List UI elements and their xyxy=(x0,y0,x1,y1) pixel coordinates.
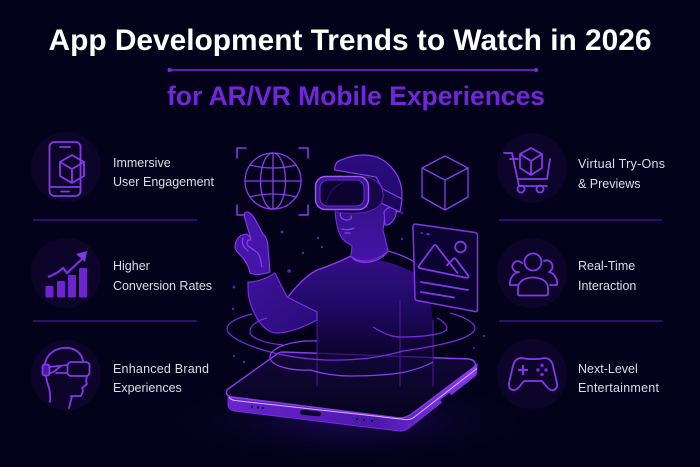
sparkle particles xyxy=(232,212,485,363)
figure: hair xyxy=(335,155,402,212)
figure: torso outline xyxy=(287,251,433,386)
label: Higher xyxy=(113,259,150,273)
label: Entertainment xyxy=(578,381,660,395)
figure: headset frame xyxy=(316,176,368,210)
label: Real-Time xyxy=(578,259,635,273)
figure: torso xyxy=(287,256,433,386)
figure: hand xyxy=(235,212,270,275)
figure: headset visor xyxy=(320,180,364,206)
rings xyxy=(227,313,475,376)
figure: sleeve xyxy=(248,273,317,333)
icon: floating image card xyxy=(413,224,478,312)
label: Interaction xyxy=(578,279,636,293)
figure: neck and face xyxy=(335,201,391,261)
icon: game controller xyxy=(509,358,557,390)
label: Conversion Rates xyxy=(113,279,212,293)
icon: three users xyxy=(510,254,557,296)
icon: phone with cube xyxy=(50,142,84,196)
title divider xyxy=(168,68,538,72)
panel: immersive user engagement xyxy=(31,132,215,202)
figure: nose and mouth xyxy=(340,212,354,233)
icon: rising bar chart xyxy=(46,251,87,298)
label: Virtual Try-Ons xyxy=(578,157,665,171)
icon: head with VR headset xyxy=(42,348,90,408)
figure: headset strap xyxy=(381,188,402,212)
panel: enhanced brand experiences xyxy=(31,340,209,410)
label: Immersive xyxy=(113,156,171,170)
dividers xyxy=(33,220,662,321)
title: App Development Trends to Watch in 2026 xyxy=(48,24,652,57)
icon: cart with cube xyxy=(504,148,550,192)
label: User Engagement xyxy=(113,175,215,189)
panel: virtual try-ons xyxy=(497,133,665,203)
label: Next-Level xyxy=(578,362,638,376)
panel: next-level entertainment xyxy=(497,339,660,409)
phone highlight xyxy=(229,368,477,420)
glow under phone xyxy=(170,378,530,462)
label: Experiences xyxy=(113,381,182,395)
panel: higher conversion rates xyxy=(31,238,212,308)
phone ports xyxy=(251,393,452,422)
figure: ear xyxy=(384,207,396,225)
figure: headset body xyxy=(335,176,383,213)
icon: wireframe cube xyxy=(422,156,468,210)
central illustration: VR user on phone xyxy=(170,148,530,462)
panel: real-time interaction xyxy=(497,238,636,308)
label: & Previews xyxy=(578,177,641,191)
subtitle: for AR/VR Mobile Experiences xyxy=(167,81,545,111)
label: Enhanced Brand xyxy=(113,362,209,376)
icon: globe in scan frame xyxy=(237,148,308,215)
phone base xyxy=(226,352,477,431)
